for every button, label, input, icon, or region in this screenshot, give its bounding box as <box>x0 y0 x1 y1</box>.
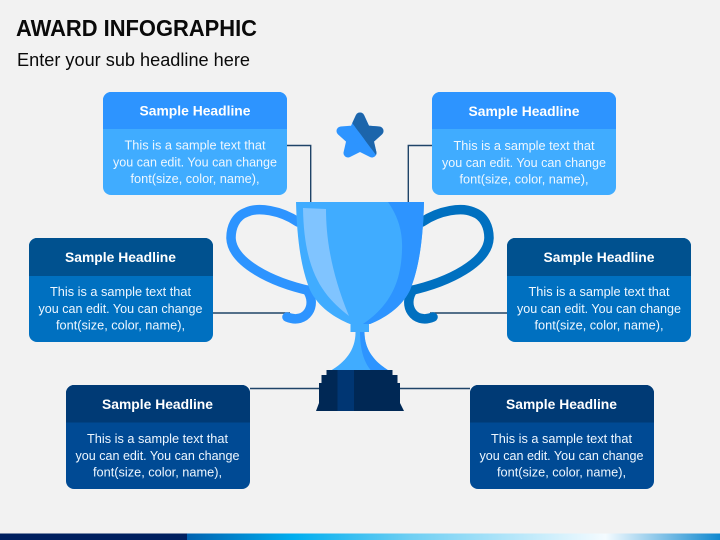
panel: middle left <box>29 238 213 342</box>
sub headline: Enter your sub headline here <box>17 50 250 70</box>
right handle <box>409 210 489 319</box>
panel: middle right: you can edit. You can change <box>517 301 681 316</box>
panel: middle left: Sample Headline <box>65 249 176 265</box>
panel: top left: you can edit. You can change <box>113 154 277 170</box>
cup highlight <box>303 208 349 316</box>
panel: middle left: you can edit. You can change <box>38 301 202 316</box>
panel: bottom right: font(size, color, name), <box>497 464 626 480</box>
footer bar <box>0 534 720 540</box>
panel: top left: Sample Headline <box>140 102 251 118</box>
panel: bottom right <box>470 385 654 489</box>
icon: trophy <box>231 202 489 411</box>
cup bowl <box>296 202 424 324</box>
stem <box>331 331 388 370</box>
panel: bottom left: font(size, color, name), <box>93 464 222 480</box>
title: AWARD INFOGRAPHIC <box>16 15 257 41</box>
panel: middle right: font(size, color, name), <box>534 318 664 332</box>
left handle <box>231 210 311 319</box>
panel: top right <box>432 92 616 195</box>
panel: middle right: Sample Headline <box>544 249 655 265</box>
panel: bottom left: Sample Headline <box>102 396 213 412</box>
panel: middle right: This is a sample text that <box>528 284 670 299</box>
base stripe <box>338 370 354 411</box>
panel: bottom left: This is a sample text that <box>87 431 228 446</box>
connector lines <box>213 146 507 388</box>
stem shade <box>360 331 388 370</box>
base <box>316 370 404 411</box>
panel: middle right <box>507 238 691 342</box>
neck <box>350 323 369 332</box>
panel: top left: This is a sample text that <box>124 138 266 152</box>
panel: bottom right: This is a sample text that <box>491 431 632 446</box>
icon: star <box>341 117 379 153</box>
panel: bottom left: you can edit. You can change <box>76 448 240 463</box>
panel: bottom right: you can edit. You can change <box>480 448 644 463</box>
panel: top right: This is a sample text that <box>454 138 595 153</box>
panel: bottom left <box>66 385 250 489</box>
panel: top right: font(size, color, name), <box>460 172 588 186</box>
panel: middle left: This is a sample text that <box>50 284 191 299</box>
panel: middle left: font(size, color, name), <box>56 318 185 332</box>
panel: top right: you can edit. You can change <box>442 155 606 170</box>
panel: top left: font(size, color, name), <box>130 171 260 186</box>
panel: bottom right: Sample Headline <box>506 396 617 412</box>
cup shade <box>363 202 424 324</box>
panel: top right: Sample Headline <box>468 103 580 119</box>
panel: top left <box>103 92 287 195</box>
